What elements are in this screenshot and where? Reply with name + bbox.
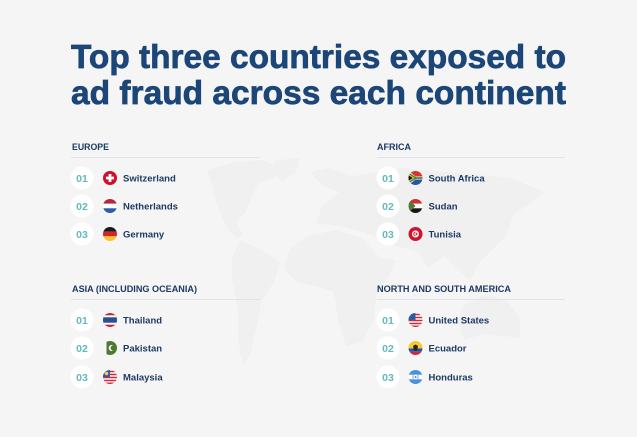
row: South Africa: South Africa (428, 174, 485, 184)
dotted world map (207, 158, 545, 366)
row: Netherlands (70, 194, 178, 218)
row: Thailand (70, 308, 162, 332)
row: South Africa (376, 166, 485, 190)
row: Thailand: Thailand (123, 316, 162, 326)
title: Top three countries exposed to (71, 38, 566, 75)
panel: Europe (70, 142, 260, 246)
panel: Africa (376, 142, 565, 246)
row: United States: 01 (382, 315, 394, 327)
row: Germany: Germany (123, 230, 165, 240)
row: Pakistan: Pakistan (123, 344, 162, 354)
row: United States: United States (428, 316, 489, 326)
heading: Americas: NORTH AND SOUTH AMERICA (377, 284, 511, 295)
row: Honduras: 03 (382, 372, 394, 384)
row: Pakistan (70, 336, 162, 360)
row: Malaysia: Malaysia (123, 372, 163, 384)
row: Tunisia: Tunisia (428, 230, 462, 240)
heading: Europe: EUROPE (72, 142, 109, 153)
panel: North and South America (376, 284, 565, 388)
row: Switzerland: 01 (76, 173, 88, 185)
row: Germany: 03 (76, 229, 88, 241)
row: Honduras: Honduras (428, 372, 473, 384)
heading: Asia: ASIA (INCLUDING OCEANIA) (72, 284, 197, 295)
heading: Africa: AFRICA (377, 142, 411, 153)
row: Netherlands: Netherlands (123, 202, 178, 212)
row: Honduras (376, 366, 473, 388)
row: United States (376, 308, 489, 332)
row: Switzerland: Switzerland (123, 174, 176, 184)
row: Ecuador: 02 (382, 343, 394, 355)
row: Sudan: 02 (382, 201, 394, 213)
row: Tunisia (376, 222, 462, 246)
row: Tunisia: 03 (382, 229, 394, 241)
row: Switzerland (70, 166, 176, 190)
title: ad fraud across each continent (71, 74, 566, 111)
row: Ecuador (376, 336, 467, 360)
row: Malaysia: 03 (76, 372, 88, 384)
row: Sudan (376, 194, 458, 218)
row: South Africa: 01 (382, 173, 394, 185)
row: Thailand: 01 (76, 315, 88, 327)
row: Germany (70, 222, 165, 246)
row: Pakistan: 02 (76, 343, 88, 355)
panel: Asia (70, 284, 260, 388)
title (71, 38, 566, 111)
row: Netherlands: 02 (76, 201, 88, 213)
row: Sudan: Sudan (428, 202, 458, 212)
row: Malaysia (70, 366, 163, 388)
row: Ecuador: Ecuador (428, 344, 467, 354)
